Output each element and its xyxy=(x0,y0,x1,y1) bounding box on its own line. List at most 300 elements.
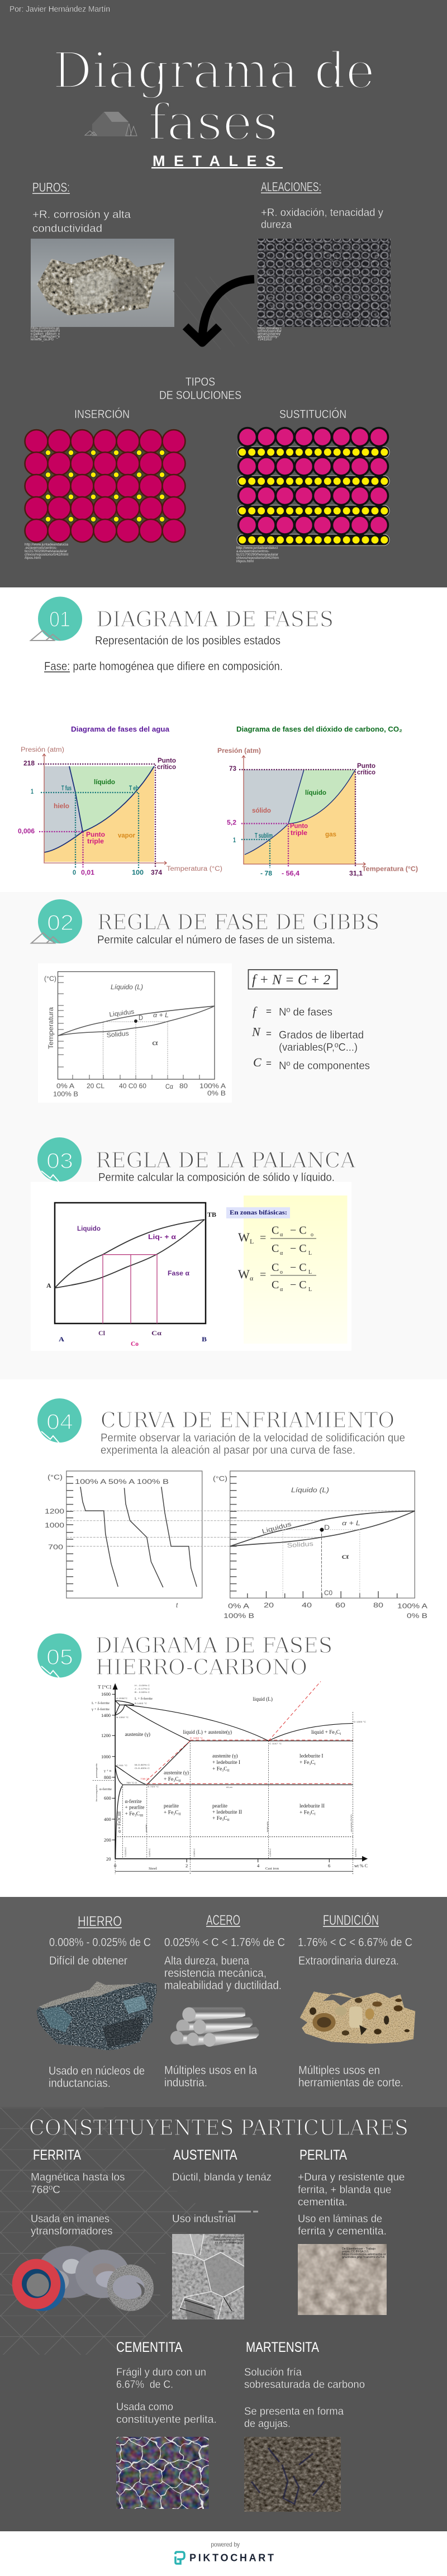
chart: iron-carbon phase diagram: C xyxy=(311,1760,315,1766)
column: perlita: cementita. xyxy=(298,2197,348,2208)
chart: iron-carbon phase diagram: Steel xyxy=(149,1867,157,1871)
image source captions: metals: https://commons.wi xyxy=(31,327,59,330)
column: aleaciones: +R. oxidación, tenacidad y xyxy=(261,207,383,219)
image source captions: metals: amanzolaney xyxy=(258,333,280,336)
chart: phase diagram of CO2: 73 xyxy=(229,766,236,772)
chart: phase diagram of water: crítico xyxy=(157,764,176,771)
chart: binary diagram with cooling projection: 100% B xyxy=(224,1613,254,1620)
formula: gibbs phase rule: f + N = C + 2 xyxy=(252,972,330,988)
chart: iron-carbon phase diagram: 1600 xyxy=(101,1691,111,1697)
chart: binary phase diagram: D xyxy=(139,1015,143,1022)
column: fundición: 1.76% < C < 6.67% de C xyxy=(298,1936,412,1949)
legend: gibbs variables: Nº de fases xyxy=(279,1007,332,1018)
heading: diagrama hierro-carbono: DIAGRAMA DE FASES xyxy=(96,1633,332,1658)
chart: phase diagram of CO2: Temperatura (°C) xyxy=(362,866,418,873)
chart: iron-carbon phase diagram: J - 0.17% C xyxy=(135,1688,150,1690)
chart: binary diagram with cooling projection: 0% A xyxy=(228,1604,249,1610)
chart: iron-carbon phase diagram: 3 xyxy=(173,1780,175,1783)
column: perlita: PERLITA xyxy=(299,2147,347,2163)
chart: cooling curves: 1000 xyxy=(45,1522,64,1529)
photo: pearlite micrograph: https://commons.wikimedia.or xyxy=(342,2253,386,2256)
chart: iron-carbon phase diagram: ledeburite I xyxy=(299,1754,323,1759)
chart: iron-carbon phase diagram xyxy=(91,1681,368,1875)
column: puros: +R. corrosión y alta xyxy=(32,209,131,221)
footer: powered by piktochart: powered by xyxy=(211,2541,240,2549)
image source captions: atom grids: http://www.juntadeandalucia xyxy=(25,543,69,547)
chart: iron-carbon phase diagram: pearlite xyxy=(145,1824,148,1832)
column: aleaciones: ALEACIONES: xyxy=(261,179,321,194)
chart: iron-carbon phase diagram: 4 xyxy=(257,1863,260,1868)
column: cementita xyxy=(116,2342,216,2509)
chart: iron-carbon phase diagram: + pearlite xyxy=(125,1805,144,1811)
chart: iron-carbon phase diagram: 3 xyxy=(309,1763,311,1766)
chart: iron-carbon phase diagram: 0.0218% C xyxy=(125,1847,127,1857)
chart: phase diagram of water: vapor xyxy=(118,833,136,839)
chart: iron-carbon phase diagram: α-ferrite xyxy=(125,1799,142,1805)
chart: iron-carbon phase diagram: pearlite xyxy=(212,1804,227,1809)
formula: W_L: α xyxy=(280,1232,283,1238)
chart: binary diagram with cooling projection: C0 xyxy=(324,1590,332,1597)
section background: constituyentes particulares xyxy=(0,2107,447,2531)
atom grid: substitution solution xyxy=(237,428,389,545)
photo: pure metal crystal xyxy=(31,239,174,327)
image source captions: atom grids: chivos/repositorio/0/42/htm xyxy=(236,557,279,560)
column: ferrita: FERRITA xyxy=(33,2147,81,2163)
chart: iron-carbon phase diagram: α + Fe3CIII xyxy=(116,1811,122,1833)
chart: iron-carbon phase diagram: + Fe xyxy=(299,1760,309,1766)
legend: gibbs variables: Nº de componentes xyxy=(279,1060,370,1072)
title xyxy=(53,41,375,151)
chart: phase diagram of water: 374 xyxy=(151,870,163,876)
chart: cooling curves: t xyxy=(176,1602,178,1609)
column: acero: industria. xyxy=(164,2076,207,2089)
icon: piktochart logo xyxy=(175,2552,184,2564)
chart: iron-carbon phase diagram: II xyxy=(227,1769,230,1773)
chart: iron-carbon phase diagram: A1,cm xyxy=(226,1786,232,1789)
column: austenita: AUSTENITA xyxy=(173,2147,237,2163)
section background: gibbs and palanca xyxy=(0,892,447,1379)
column: acero: maleabilidad y ductilidad. xyxy=(164,1979,282,1992)
chart: iron-carbon phase diagram: 6 xyxy=(328,1863,330,1868)
subtitle: metales: METALES xyxy=(153,153,275,169)
photo: austenite micrograph: 312b7dd33c8.jpg xyxy=(215,2241,242,2245)
chart: phase diagram of water: 0 xyxy=(73,870,76,876)
heading: regla de la palanca: REGLA DE LA PALANCA xyxy=(96,1148,356,1173)
image source captions: metals xyxy=(31,327,282,341)
photo: pearlite micrograph: propio, CC BY-SA 3.0, xyxy=(342,2250,369,2254)
title: fases xyxy=(148,93,278,151)
column: fundición: Múltiples usos en xyxy=(298,2064,380,2077)
image source captions: metals: 7241162/ xyxy=(258,338,272,341)
icon: house with trees xyxy=(85,112,137,136)
chart: iron-carbon phase diagram: H - 0.09% C xyxy=(135,1685,150,1687)
chart: binary diagram with cooling projection: Líquido (L) xyxy=(291,1487,329,1494)
chart: phase diagram of CO2: 5,2 xyxy=(227,819,236,826)
column: martensita: Solución fría xyxy=(244,2367,302,2379)
legend: gibbs variables: N xyxy=(251,1025,261,1039)
photo: pearlite micrograph: De Eisenbeisser - Trabajo xyxy=(342,2247,375,2251)
definition: fase: Fase: parte homogénea que difiere en composición. xyxy=(44,660,283,673)
formula: W_alpha: α xyxy=(250,1274,254,1282)
footer: powered by piktochart: PIKTOCHART xyxy=(189,2553,274,2564)
column: cementita: Frágil y duro con un xyxy=(116,2367,206,2379)
column: hierro: Usado en núcleos de xyxy=(49,2065,145,2077)
chart: binary phase diagram: Solidus xyxy=(106,1031,129,1039)
column: ferrita xyxy=(12,2147,154,2311)
legend: gibbs variables: C xyxy=(253,1055,261,1069)
chart: iron-carbon phase diagram: 2 xyxy=(186,1863,188,1868)
column: hierro: Difícil de obtener xyxy=(49,1954,127,1967)
chart: iron-carbon phase diagram: T [°C] xyxy=(98,1684,111,1690)
formula: W_alpha: C xyxy=(272,1261,279,1274)
photo: martensite micrograph xyxy=(244,2437,341,2512)
chart: iron-carbon phase diagram: γ + δ-ferrite xyxy=(91,1707,110,1711)
chart: phase diagram of CO2: gas xyxy=(325,832,336,838)
chart: iron-carbon phase diagram: II xyxy=(179,1780,181,1783)
section background: diagrama de fases xyxy=(0,587,447,892)
chart: binary phase diagram: 80 xyxy=(179,1083,188,1090)
column: puros: PUROS: xyxy=(32,180,70,194)
section background: hierro acero fundición xyxy=(0,1897,447,2107)
chart: iron-carbon phase diagram: 3 xyxy=(173,1813,175,1816)
chart: iron-carbon phase diagram: liquid (L) + austenite(γ) xyxy=(183,1729,232,1735)
column: perlita xyxy=(298,2147,405,2315)
chart: phase diagram of water: Temperatura (°C) xyxy=(167,866,222,872)
chart: iron-carbon phase diagram: L + δ-ferrite xyxy=(135,1697,153,1701)
chart: iron-carbon phase diagram: B - 0.53% C xyxy=(135,1691,150,1693)
formula: W_L: L xyxy=(250,1237,254,1245)
chart: phase diagram of water xyxy=(18,725,222,876)
badge: 04 xyxy=(37,1398,82,1443)
column: hierro: inductancias. xyxy=(49,2077,111,2090)
chart: phase diagram of water: 218 xyxy=(23,760,35,767)
chart: iron-carbon phase diagram: + Fe xyxy=(299,1810,309,1816)
formula: W_alpha: C xyxy=(272,1279,279,1291)
chart: iron-carbon phase diagram: II xyxy=(179,1813,181,1816)
heading: diagrama hierro-carbono: HIERRO-CARBONO xyxy=(96,1655,307,1680)
column: martensita xyxy=(244,2340,365,2512)
formula: W_L: C xyxy=(272,1225,279,1237)
column: austenita xyxy=(172,2147,272,2319)
chart: binary phase diagram: 20 CL xyxy=(87,1083,105,1090)
image source captions: atom grids: tic/21700290/helvia/aula/ar xyxy=(25,550,67,553)
chart: iron-carbon phase diagram: 0.80% C xyxy=(149,1848,151,1857)
chart: phase diagram of CO2: líquido xyxy=(305,790,326,796)
chart: phase diagram of water: Punto xyxy=(158,758,176,765)
legend: gibbs variables: (variables(P,ºC...) xyxy=(279,1042,358,1054)
column: fundición: herramientas de corte. xyxy=(298,2076,403,2089)
chart: iron-carbon phase diagram: N 1392 °C xyxy=(116,1716,129,1719)
intro text: palanca: Permite calcular la composición de sólido y líquido. xyxy=(98,1171,335,1184)
image source captions: metals: n.Die_chemischen_e xyxy=(31,335,60,339)
photo: austenite micrograph xyxy=(172,2234,244,2319)
column: fundición: FUNDICIÓN xyxy=(323,1912,379,1928)
chart: binary diagram with cooling projection: 40 xyxy=(302,1602,312,1609)
chart: binary phase diagram: 100% B xyxy=(53,1091,78,1098)
chart: iron-carbon phase diagram: I xyxy=(315,1813,316,1816)
chart: phase diagram of water: T fus xyxy=(61,785,72,792)
chart: iron-carbon phase diagram: C 1147 °C xyxy=(269,1743,282,1745)
column: cementita: 6.67% de C. xyxy=(116,2379,173,2391)
formula: W_L: W xyxy=(238,1230,250,1244)
chart: lever rule diagram: A xyxy=(46,1282,51,1289)
chart: binary phase diagram: α xyxy=(152,1040,159,1047)
column: austenita: Uso industrial xyxy=(172,2213,236,2225)
section background: footer xyxy=(0,2531,447,2576)
column: martensita: MARTENSITA xyxy=(246,2340,319,2355)
callout: en zonas bifásicas xyxy=(226,1207,290,1218)
author byline: Por: Javier Hernández Martín xyxy=(9,4,110,14)
chart: iron-carbon phase diagram: liquid + Fe xyxy=(311,1730,335,1735)
image source captions: metals: alloysfromy- xyxy=(258,335,279,339)
chart: lever rule diagram xyxy=(46,1203,216,1348)
chart: lever rule diagram: Liquido xyxy=(77,1225,101,1232)
chart: binary phase diagram: 0% A xyxy=(56,1083,74,1090)
badge: 02 xyxy=(31,899,82,943)
chart: iron-carbon phase diagram: 738 °C xyxy=(140,1778,150,1780)
chart: iron-carbon phase diagram: pearlite xyxy=(164,1804,179,1809)
column: hierro xyxy=(36,1914,157,2090)
column: acero: 0.025% < C < 1.76% de C xyxy=(164,1936,285,1949)
chart: binary phase diagram: 0% B xyxy=(207,1090,226,1097)
chart: iron-carbon phase diagram: + Fe xyxy=(164,1810,173,1816)
chart title: water: Diagrama de fases del agua xyxy=(71,725,170,733)
chart: phase diagram of water: 0,006 xyxy=(18,828,35,835)
image source captions: metals: lemente_ca.JPG xyxy=(31,338,54,341)
column: perlita: ferrita, + blanda que xyxy=(298,2184,391,2196)
badge: 04: 04 xyxy=(46,1410,73,1434)
chart: iron-carbon phase diagram: C xyxy=(175,1810,179,1816)
chart: iron-carbon phase diagram: L + δ-ferrite xyxy=(92,1701,110,1705)
legend: gibbs variables: Grados de libertad xyxy=(279,1030,364,1041)
chart: binary diagram with cooling projection: 80 xyxy=(373,1602,383,1609)
chart: phase diagram of water: 100 xyxy=(132,870,144,876)
chart: iron-carbon phase diagram: cementite (Fe3C) xyxy=(350,1814,353,1832)
legend: gibbs variables: = xyxy=(266,1058,272,1069)
heading: curva de enfriamiento: CURVA DE ENFRIAMIENTO xyxy=(101,1408,394,1432)
chart: iron-carbon phase diagram: 1400 xyxy=(101,1712,111,1718)
column: austenita: Dúctil, blanda y tenáz xyxy=(172,2172,272,2184)
chart: iron-carbon phase diagram: 3 xyxy=(335,1733,336,1736)
heading: tipos de soluciones: DE SOLUCIONES xyxy=(159,389,241,402)
chart: binary diagram with cooling projection xyxy=(213,1471,427,1620)
formula: W_L: − C xyxy=(290,1225,307,1237)
column: cementita: constituyente perlita. xyxy=(116,2414,217,2426)
formula: W_L: C xyxy=(272,1242,279,1255)
chart: iron-carbon phase diagram: 0 xyxy=(114,1863,116,1868)
chart: iron-carbon phase diagram: 1200 xyxy=(101,1733,111,1738)
photo: iron ore rock xyxy=(36,1981,157,2050)
chart: iron-carbon phase diagram: C xyxy=(136,1811,140,1817)
heading: diagrama hierro-carbono xyxy=(96,1633,332,1680)
heading: diagrama de fases: DIAGRAMA DE FASES xyxy=(96,607,334,632)
image source captions: metals: om/es/users/kar xyxy=(258,330,282,333)
chart: iron-carbon phase diagram: 200 xyxy=(104,1837,111,1843)
chart: iron-carbon phase diagram: 600 xyxy=(104,1795,111,1801)
column: acero xyxy=(164,1913,285,2089)
chart: iron-carbon phase diagram: liquid (L) xyxy=(253,1696,273,1702)
chart: binary diagram with cooling projection: D xyxy=(324,1525,330,1531)
formula: W_L: = xyxy=(260,1232,266,1244)
chart: binary phase diagram: 40 C0 60 xyxy=(119,1083,146,1090)
chart: iron-carbon phase diagram: C xyxy=(175,1777,179,1782)
chart: phase diagram of water: líquido xyxy=(94,779,115,786)
formula: W_alpha: o xyxy=(280,1269,283,1275)
chart: phase diagram of CO2 xyxy=(217,725,418,877)
badge: 01: 01 xyxy=(49,608,70,632)
chart: iron-carbon phase diagram: B 1493 °C xyxy=(135,1702,147,1705)
formula: W_alpha: L xyxy=(308,1287,312,1293)
chart: binary phase diagram: Líquido (L) xyxy=(111,984,143,991)
chart: iron-carbon phase diagram: 1000 xyxy=(101,1754,111,1759)
chart: iron-carbon phase diagram: + ledeburite II xyxy=(212,1810,242,1815)
chart: phase diagram of CO2: Presión (atm) xyxy=(217,748,261,755)
badge: 03: 03 xyxy=(46,1149,73,1173)
chart: binary diagram with cooling projection: α xyxy=(341,1554,350,1560)
chart: iron-carbon phase diagram: S 723 °C xyxy=(148,1786,159,1788)
chart: lever rule diagram: Liq- + α xyxy=(148,1233,177,1241)
chart: binary phase diagram: Liquidus xyxy=(109,1009,135,1018)
formula: W_L: o xyxy=(311,1232,313,1238)
photo: steel bars xyxy=(170,2007,259,2047)
image source captions: atom grids xyxy=(25,543,279,563)
chart: phase diagram of CO2: triple xyxy=(291,830,307,837)
column: aleaciones: dureza xyxy=(261,219,292,231)
chart: lever rule diagram: A xyxy=(59,1335,64,1343)
chart: iron-carbon phase diagram: ledeburite xyxy=(267,1821,269,1832)
chart: phase diagram of water: 1 xyxy=(31,789,34,795)
column: fundición: Extraordinaria dureza. xyxy=(298,1954,399,1967)
chart: cooling curves xyxy=(45,1471,415,1609)
chart: iron-carbon phase diagram: I xyxy=(315,1763,316,1766)
column: hierro: HIERRO xyxy=(78,1914,122,1929)
formula: gibbs phase rule xyxy=(248,970,337,989)
chart: binary diagram with cooling projection: (°C) xyxy=(213,1476,227,1482)
chart: iron-carbon phase diagram: 20 xyxy=(106,1856,111,1862)
chart: phase diagram of water: T eb xyxy=(129,785,139,792)
chart: iron-carbon phase diagram: A 1536°C xyxy=(116,1697,127,1700)
formula: W_alpha: − C xyxy=(290,1261,307,1274)
chart: lever rule diagram: Cl xyxy=(98,1329,106,1337)
image source captions: atom grids: /tipos.html xyxy=(25,557,41,560)
chart: iron-carbon phase diagram: E' 1153 °C xyxy=(190,1737,203,1739)
formula: W_alpha: W xyxy=(238,1267,250,1281)
badge: 05 xyxy=(37,1633,82,1678)
chart: iron-carbon phase diagram: 400 xyxy=(104,1816,111,1822)
column: puros xyxy=(32,180,131,235)
chart: cooling curves: 100% A 50% A 100% B xyxy=(75,1479,169,1486)
image source captions: atom grids: .es/averroes/centros- xyxy=(25,547,57,550)
legend: gibbs variables: = xyxy=(266,1028,272,1039)
chart: lever rule diagram: B xyxy=(202,1335,207,1343)
chart: lever rule diagram: Fase α xyxy=(168,1269,190,1277)
formula: W_L: α xyxy=(280,1250,283,1256)
chart: iron-carbon phase diagram: 4.30% C xyxy=(269,1848,272,1857)
image source captions: metals: https://pixabay.c xyxy=(258,327,282,330)
column: hierro: 0.008% - 0.025% de C xyxy=(49,1936,151,1949)
photo: pearlite micrograph: g/w/index.php?curid=915254 xyxy=(342,2256,384,2259)
chart: iron-carbon phase diagram: III xyxy=(140,1814,143,1818)
chart: iron-carbon phase diagram: 800 xyxy=(104,1775,111,1780)
photo: alloy eyelets xyxy=(258,239,391,327)
chart: iron-carbon phase diagram: paramagnetic xyxy=(96,1763,98,1778)
chart: iron-carbon phase diagram: 3 xyxy=(135,1814,136,1818)
legend: gibbs variables: f xyxy=(253,1004,258,1018)
intro text: enfriamiento: experimenta la aleación al pasar por una curva de fase. xyxy=(101,1444,355,1457)
panel: lever rule diagram and formulas xyxy=(31,1182,351,1351)
legend: gibbs variables xyxy=(251,1004,370,1072)
column: cementita: CEMENTITA xyxy=(116,2340,183,2355)
chart: phase diagram of CO2: 31,1 xyxy=(349,871,363,877)
heading: regla de fase de gibbs: REGLA DE FASE DE GIBBS xyxy=(97,910,379,934)
heading: tipos de soluciones xyxy=(159,376,241,402)
chart: iron-carbon phase diagram: wt % C xyxy=(354,1863,368,1868)
chart: iron-carbon phase diagram: I xyxy=(340,1733,341,1736)
intro text: gibbs: Permite calcular el número de fases de un sistema. xyxy=(97,934,335,946)
column: puros: conductividad xyxy=(32,223,102,235)
chart: iron-carbon phase diagram: D 1300 °C xyxy=(354,1721,366,1723)
formula: W_alpha: α xyxy=(280,1287,283,1293)
title: Diagrama de xyxy=(53,41,375,99)
chart: binary diagram with cooling projection: 0% B xyxy=(407,1613,427,1620)
formula: W_L: L xyxy=(308,1250,312,1256)
chart: binary phase diagram: Temperatura xyxy=(48,1007,55,1049)
chart: iron-carbon phase diagram: + Fe xyxy=(212,1767,222,1772)
legend: gibbs variables: = xyxy=(266,1006,272,1017)
chart: phase diagram of CO2: 1 xyxy=(233,837,236,844)
chart: iron-carbon phase diagram: II xyxy=(227,1819,230,1822)
chart: phase diagram of water: hielo xyxy=(54,803,69,810)
atom grid: insertion solution xyxy=(25,430,186,542)
chart: phase diagram of CO2: - 78 xyxy=(260,871,273,877)
heading: constituyentes particulares: CONSTITUYENTES PARTICULARES xyxy=(29,2115,408,2140)
chart: iron-carbon phase diagram: + Fe xyxy=(125,1811,135,1817)
chart: cooling curves: 700 xyxy=(48,1544,63,1551)
column: ferrita: Magnética hasta los xyxy=(31,2172,125,2184)
heading: tipos de soluciones: TIPOS xyxy=(186,376,215,388)
formula: W_alpha xyxy=(238,1261,316,1293)
chart: lever rule diagram: TB xyxy=(207,1211,216,1218)
chart: lever rule diagram: Cα xyxy=(151,1329,161,1337)
image source captions: atom grids: http://www.juntadeandaluci xyxy=(236,547,278,550)
chart: iron-carbon phase diagram: austenite (γ) xyxy=(164,1769,189,1776)
chart: phase diagram of CO2: Punto xyxy=(357,763,375,770)
chart: iron-carbon phase diagram: austenite (γ) xyxy=(212,1753,238,1759)
chart: binary phase diagram: Cα xyxy=(165,1084,173,1090)
chart: phase diagram of CO2: Punto xyxy=(290,823,308,830)
chart: iron-carbon phase diagram: 3 xyxy=(222,1769,224,1773)
column: ferrita: ytransformadores xyxy=(31,2226,113,2237)
chart: iron-carbon phase diagram: γ + α xyxy=(103,1769,112,1773)
column: perlita: +Dura y resistente que xyxy=(298,2172,405,2184)
column: acero: resistencia mecánica, xyxy=(164,1967,267,1980)
footer: powered by piktochart xyxy=(175,2541,274,2564)
chart: phase diagram of CO2: T sublim xyxy=(255,833,273,839)
chart: iron-carbon phase diagram: + Fe xyxy=(212,1816,222,1821)
chart: iron-carbon phase diagram: C xyxy=(336,1730,340,1735)
chart: iron-carbon phase diagram: C xyxy=(311,1810,315,1816)
chart: iron-carbon phase diagram: austenite (γ) xyxy=(125,1731,150,1738)
chart: binary phase diagram: 100% A xyxy=(199,1083,226,1090)
chart: iron-carbon phase diagram: 2.06% C xyxy=(193,1848,196,1857)
chart: iron-carbon phase diagram: ledeburite II xyxy=(299,1804,325,1809)
chart: iron-carbon phase diagram: 769 °C O xyxy=(126,1782,137,1784)
section background: curva de enfriamiento and hierro-carbono xyxy=(0,1379,447,1897)
chart: iron-carbon phase diagram: 6.67% C xyxy=(355,1848,357,1857)
chart: binary diagram with cooling projection: Solidus xyxy=(287,1541,313,1549)
section background: metales intro xyxy=(0,0,447,587)
column: ferrita: 768ºC xyxy=(31,2184,60,2196)
